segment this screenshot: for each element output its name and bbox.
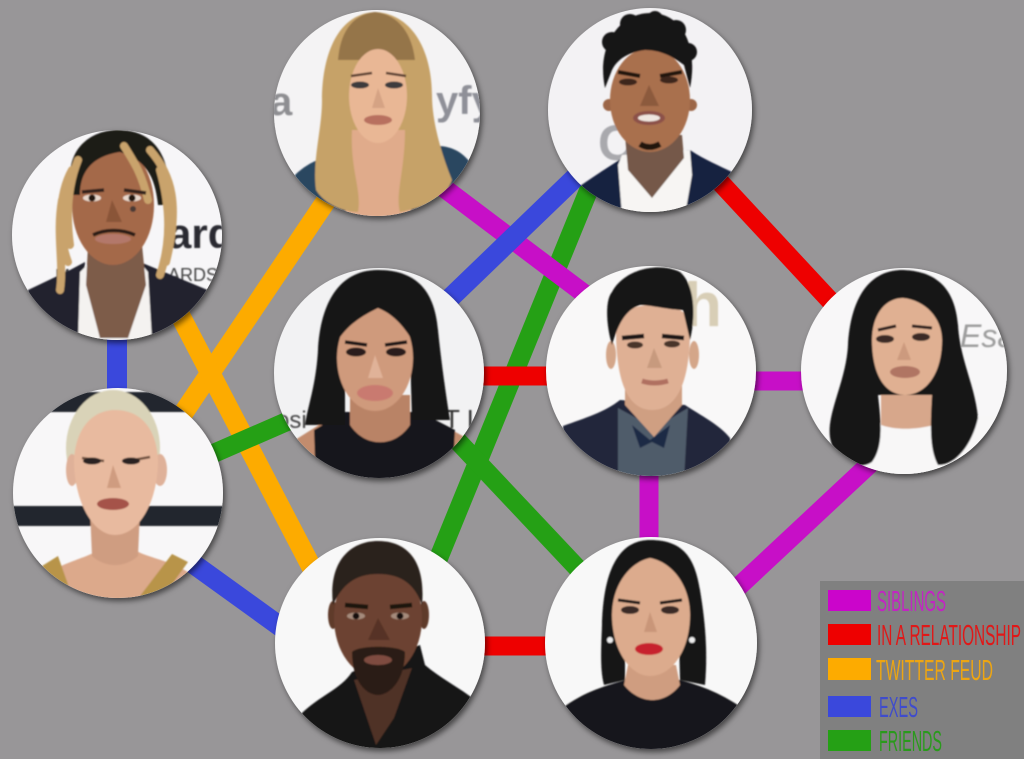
legend panel	[820, 581, 1024, 759]
portrait: Khloe Kardashian	[270, 8, 495, 220]
portrait: Blac Chyna: osi	[276, 407, 307, 434]
portrait: Kanye West	[272, 535, 488, 755]
legend: exes: EXES	[879, 692, 918, 724]
portrait: Khloe Kardashian: yfy	[436, 79, 495, 123]
portrait: Wiz Khalifa: M	[55, 266, 70, 286]
portrait: Rob Kardashian	[543, 263, 759, 480]
legend: exes	[828, 692, 918, 724]
legend: twitter feud	[828, 655, 993, 687]
portrait: Blac Chyna	[270, 265, 488, 490]
portrait: Wiz Khalifa: ard	[168, 210, 233, 257]
portrait: Tyga: C	[598, 115, 634, 171]
connections: friends	[210, 182, 592, 573]
legend: siblings: SIBLINGS	[877, 586, 946, 618]
legend: siblings	[828, 586, 946, 618]
connections: exes	[117, 170, 583, 630]
portrait: Tyga	[545, 5, 755, 215]
portrait: Khloe Kardashian: a	[270, 80, 293, 124]
portrait: Wiz Khalifa	[10, 128, 233, 343]
legend panel: FRIENDS	[879, 726, 942, 758]
connections: siblings	[440, 185, 872, 590]
portrait: Amber Rose	[10, 386, 226, 610]
connections: in a relationship	[480, 180, 836, 646]
portrait: Kim Kardashian	[543, 535, 759, 755]
portrait: Kylie Jenner	[798, 265, 1015, 480]
portrait: Wiz Khalifa: ARDS	[168, 265, 218, 285]
portrait: Kylie Jenner: Esa	[960, 318, 1015, 354]
legend: friends	[828, 726, 942, 758]
portrait: Blac Chyna: T I	[444, 404, 474, 434]
portrait: Rob Kardashian: h	[684, 271, 722, 340]
connections: twitter feud	[180, 192, 332, 572]
